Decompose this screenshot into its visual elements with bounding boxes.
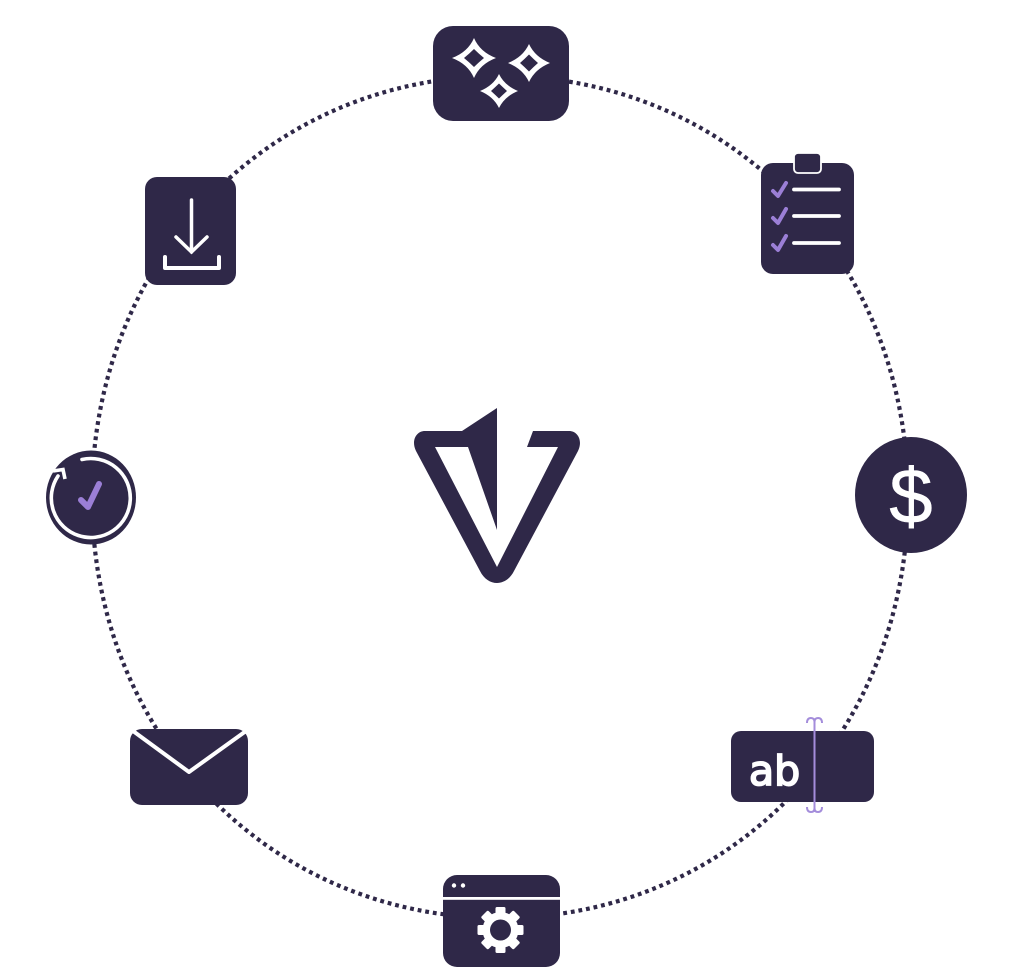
icon: text resize: ab (749, 747, 800, 795)
icon: download (145, 177, 236, 285)
icon: dollar coin (855, 437, 967, 553)
icon: sparkles (433, 26, 569, 121)
icon: renew check badge (46, 450, 136, 544)
icon: text resize (731, 718, 874, 812)
dotted ring (92, 76, 908, 918)
icon: dollar coin: $ (889, 452, 933, 540)
icon: settings window (443, 875, 560, 967)
center logo (414, 408, 580, 583)
icon: envelope (130, 729, 248, 805)
icon: checklist clipboard (761, 153, 854, 274)
